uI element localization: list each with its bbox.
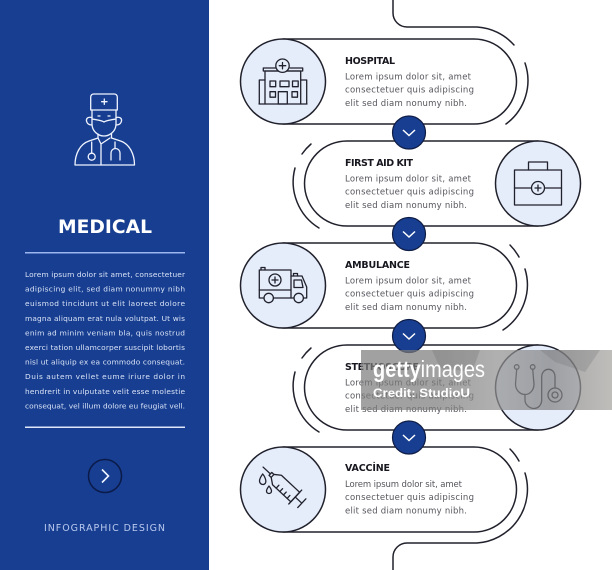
text block: hospital: Lorem ipsum dolor sit, amet — [345, 72, 472, 82]
connector lines — [293, 0, 528, 570]
text block: first aid kit: Lorem ipsum dolor sit, amet — [345, 174, 472, 184]
icon: ambulance — [259, 268, 307, 303]
text block: vaccine: Lorem ipsum dolor sit, amet — [345, 480, 463, 490]
text block: description: euismod tincidunt ut elit laoreet dolore — [25, 299, 185, 308]
icon: chevron button 2 — [392, 218, 426, 250]
text block: description: nisl ut aliquip ex ea commodo consequat. — [25, 358, 185, 367]
panel: first aid kit — [305, 141, 580, 226]
text block: description: Duis autem vellet eume iriure dolor in — [25, 372, 185, 381]
text block: stethoscope — [345, 378, 474, 415]
text block: description: enim ad minim veniam bla, quis nostrud — [25, 328, 185, 337]
icon: first aid kit — [514, 162, 562, 205]
text block: description: adipiscing elit, sed diam nonummy nibh — [25, 285, 185, 294]
text block: description: consequat, vel illum dolore eu feugiat vell. — [25, 401, 185, 410]
text block: ambulance — [345, 276, 474, 313]
panel: hospital — [240, 39, 516, 124]
heading: vaccine: VACCİNE — [345, 463, 390, 474]
heading: ambulance: AMBULANCE — [345, 260, 410, 271]
text block: first aid kit: elit sed diam nonumy nibh. — [345, 201, 467, 211]
icon: chevron button 1 — [392, 116, 426, 149]
text block: first aid kit — [345, 174, 474, 211]
heading: hospital: HOSPITAL — [345, 56, 395, 67]
text block: hospital — [345, 72, 474, 109]
text block: vaccine — [345, 480, 474, 516]
text block: hospital: elit sed diam nonumy nibh. — [345, 99, 467, 109]
text block: ambulance: Lorem ipsum dolor sit, amet — [345, 276, 472, 286]
text block: ambulance: elit sed diam nonumy nibh. — [345, 303, 467, 313]
text block: vaccine: consectetuer quis adipiscing — [345, 493, 474, 503]
icon: stethoscope — [514, 365, 562, 408]
icon: doctor — [75, 94, 134, 165]
heading: first aid kit: FIRST AID KIT — [345, 158, 414, 169]
icon: syringe and drops — [257, 460, 308, 510]
text block: hospital: consectetuer quis adipiscing — [345, 86, 474, 96]
icon: hospital — [259, 59, 307, 104]
panel: stethoscope — [304, 345, 580, 430]
watermark text: credit: Credit: StudioU — [373, 386, 470, 400]
text block: first aid kit: consectetuer quis adipiscing — [345, 188, 474, 198]
title: Medical: MEDICAL — [58, 217, 152, 238]
icon: chevron button 3 — [392, 320, 426, 352]
caption: infographic design: INFOGRAPHIC DESIGN — [44, 523, 165, 534]
panel: left sidebar — [0, 0, 209, 570]
icon: next arrow button — [88, 460, 122, 492]
text block: description: magna aliquam erat nula volutpat. Ut wis — [25, 314, 185, 323]
panel: vaccine — [240, 447, 516, 532]
text block: description — [25, 270, 186, 410]
watermark band — [361, 350, 612, 410]
text block: vaccine: elit sed diam nonumy nibh. — [345, 506, 467, 516]
icon: chevron button 4 — [392, 421, 426, 454]
text block: ambulance: consectetuer quis adipiscing — [345, 290, 474, 300]
text block: stethoscope: Lorem ipsum dolor sit, amet — [345, 378, 472, 388]
text block: description: hendrerit in vulputate velit esse molestie — [25, 387, 185, 396]
heading: stethoscope: STETHOSCOPE — [345, 362, 419, 373]
text block: description: exerci tation ullamcorper suscipit lobortis — [25, 343, 185, 352]
text block: stethoscope: consectetuer quis adipiscing — [345, 392, 474, 402]
text block: stethoscope: elit sed diam nonumy nibh. — [345, 405, 467, 415]
watermark text: gettyimages: gettyimages — [373, 356, 485, 382]
panel: ambulance — [240, 243, 516, 328]
text block: description: Lorem ipsum dolor sit amet, consectetuer — [25, 270, 186, 279]
